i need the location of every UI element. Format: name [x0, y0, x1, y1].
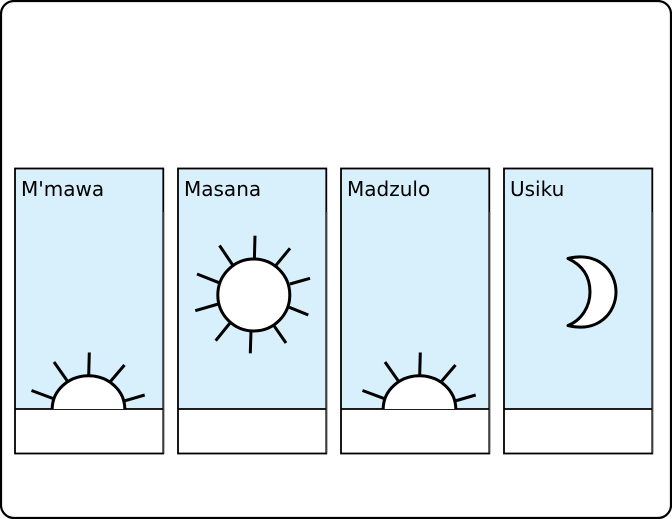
panel ground	[178, 409, 326, 454]
panel: Madzulo (evening)	[341, 168, 490, 454]
panel border	[178, 168, 327, 454]
icon: setting sun	[362, 352, 476, 409]
icon: full sun	[195, 236, 310, 353]
panel sky	[504, 168, 652, 409]
label: Madzulo: Madzulo	[347, 177, 430, 201]
icon: rising sun	[32, 352, 145, 409]
icon: crescent moon	[568, 257, 616, 327]
panel ground	[341, 409, 489, 454]
label: Usiku: Usiku	[510, 177, 564, 201]
panel border	[341, 168, 490, 454]
panel border	[15, 168, 164, 454]
panel sky	[15, 168, 163, 409]
panel: Usiku (night)	[504, 168, 653, 454]
panel: M'mawa (morning)	[15, 168, 164, 454]
panel border	[504, 168, 653, 454]
panel ground	[15, 409, 163, 454]
label: M'mawa: M'mawa	[21, 177, 104, 201]
label: Masana: Masana	[184, 177, 261, 201]
panel sky	[341, 168, 489, 409]
panel sky	[178, 168, 326, 409]
panel: Masana (afternoon)	[178, 168, 327, 454]
panel ground	[504, 409, 652, 454]
